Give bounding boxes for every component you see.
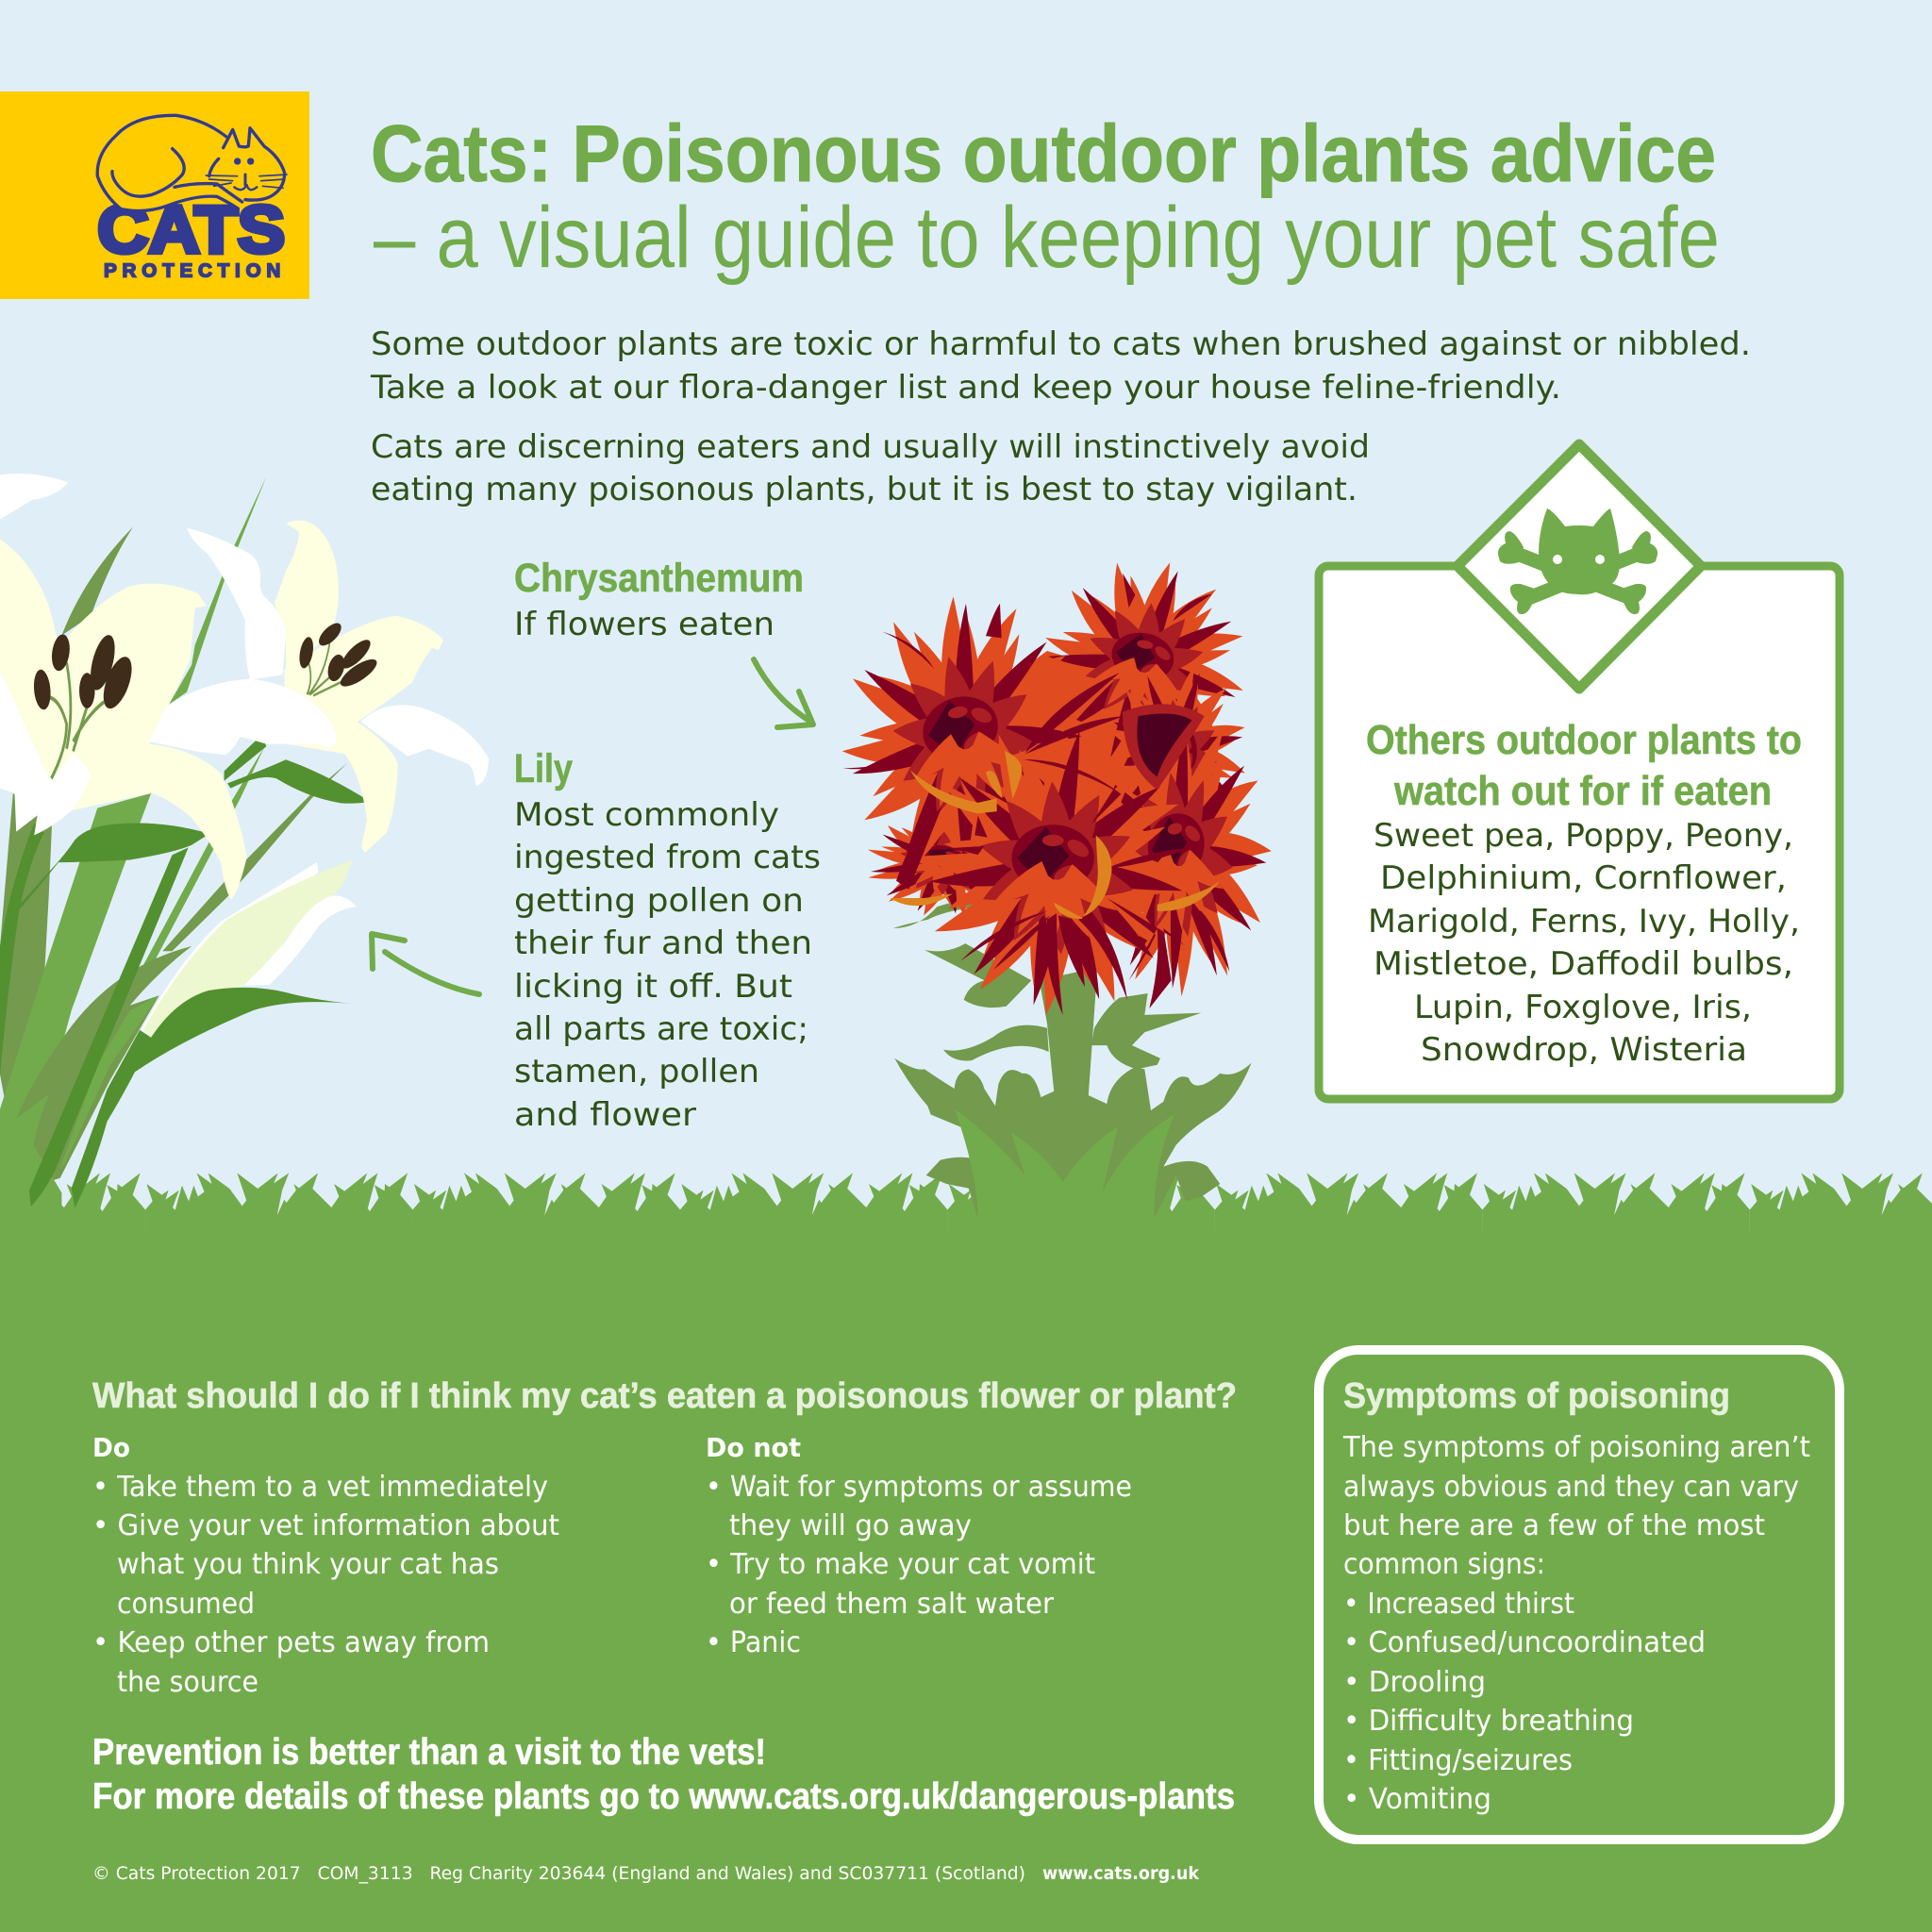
grass ground <box>0 1173 1932 1932</box>
chrysanthemum blooms <box>823 542 1280 1015</box>
chrysanthemum label: If flowers eaten <box>514 606 774 643</box>
advice heading: What should I do if I think my cat’s eaten a poisonous flower or plant? <box>92 1376 1237 1416</box>
prevention message <box>92 1732 1235 1817</box>
icon: cat skull and crossbones <box>1498 508 1657 614</box>
do list <box>92 1432 559 1699</box>
do list: • Take them to a vet immediately <box>92 1471 548 1504</box>
plant list <box>1368 817 1800 1069</box>
do list: consumed <box>117 1588 255 1621</box>
logo: Cats Protection: PROTECTION <box>104 259 280 281</box>
panel heading <box>1366 717 1802 814</box>
symptoms heading: Symptoms of poisoning <box>1343 1376 1730 1416</box>
do list: • Give your vet information about <box>92 1509 559 1542</box>
symptoms text: • Vomiting <box>1343 1783 1491 1816</box>
lily label: Most commonly <box>514 796 779 834</box>
arrow to chrysanthemum <box>754 659 813 727</box>
title: – a visual guide to keeping your pet safe <box>374 190 1720 286</box>
chrysanthemum grass tuft <box>955 1108 1174 1219</box>
title: Cats: Poisonous outdoor plants advice <box>371 109 1716 199</box>
plant list: Mistletoe, Daffodil bulbs, <box>1374 945 1793 983</box>
symptoms text: common signs: <box>1343 1548 1545 1581</box>
lily label: stamen, pollen <box>514 1053 759 1091</box>
do list: Do <box>92 1432 130 1463</box>
do not list: Do not <box>706 1432 801 1463</box>
panel heading: Others outdoor plants to <box>1366 717 1802 763</box>
plant list: Lupin, Foxglove, Iris, <box>1414 989 1752 1026</box>
symptoms text: but here are a few of the most <box>1343 1509 1765 1542</box>
symptoms text: The symptoms of poisoning aren’t <box>1342 1431 1810 1464</box>
footer: © Cats Protection 2017 COM_3113 Reg Charity 203644 (England and Wales) and SC037711 (Scotland) <box>92 1863 1025 1884</box>
do not list: • Try to make your cat vomit <box>706 1548 1095 1581</box>
panel: others outdoor plants <box>1319 444 1840 1099</box>
chrysanthemum foliage <box>893 893 1252 1219</box>
symptoms text <box>1342 1431 1810 1816</box>
lily flower right <box>149 520 489 853</box>
logo: Cats Protection <box>0 92 309 299</box>
panel: symptoms of poisoning <box>1319 1350 1840 1840</box>
intro text: eating many poisonous plants, but it is best to stay vigilant. <box>371 471 1357 508</box>
symptoms text: • Drooling <box>1343 1666 1486 1699</box>
title <box>371 109 1720 286</box>
intro text: Cats are discerning eaters and usually will instinctively avoid <box>371 428 1370 466</box>
lily label: Lily <box>514 746 573 791</box>
plant list: Marigold, Ferns, Ivy, Holly, <box>1368 903 1800 941</box>
do not list: or feed them salt water <box>729 1588 1055 1621</box>
prevention message: For more details of these plants go to www.cats.org.uk/dangerous-plants <box>92 1776 1235 1817</box>
do not list: they will go away <box>729 1509 972 1542</box>
lily label: licking it off. But <box>514 968 792 1006</box>
panel heading: watch out for if eaten <box>1393 768 1772 814</box>
plant list: Sweet pea, Poppy, Peony, <box>1374 817 1793 855</box>
intro text: Take a look at our flora-danger list and keep your house feline-friendly. <box>370 369 1561 407</box>
intro text <box>370 325 1751 508</box>
footer: www.cats.org.uk <box>1042 1863 1199 1884</box>
lily label: their fur and then <box>514 924 812 962</box>
logo: Cats Protection: CATS <box>97 192 285 267</box>
do not list <box>706 1432 1132 1659</box>
symptoms text: • Difficulty breathing <box>1343 1705 1634 1738</box>
plant list: Delphinium, Cornflower, <box>1380 859 1787 897</box>
lily flower left <box>0 474 247 899</box>
intro text: Some outdoor plants are toxic or harmful to cats when brushed against or nibbled. <box>371 325 1751 363</box>
lily label <box>514 746 821 1134</box>
symptoms text: • Confused/uncoordinated <box>1343 1626 1706 1659</box>
symptoms text: always obvious and they can vary <box>1343 1471 1799 1504</box>
lily label: getting pollen on <box>514 882 804 920</box>
symptoms text: • Fitting/seizures <box>1343 1744 1573 1777</box>
symptoms text: • Increased thirst <box>1343 1588 1574 1621</box>
lily label: all parts are toxic; <box>514 1010 808 1048</box>
plant list: Snowdrop, Wisteria <box>1421 1031 1747 1069</box>
illustration: lily plant <box>0 474 489 1226</box>
do not list: • Panic <box>706 1626 801 1659</box>
arrow to lily <box>372 934 479 994</box>
do list: • Keep other pets away from <box>92 1626 490 1659</box>
do not list: • Wait for symptoms or assume <box>706 1471 1132 1504</box>
lily label: ingested from cats <box>514 839 821 876</box>
do list: the source <box>117 1666 258 1699</box>
lily label: and flower <box>514 1096 696 1134</box>
danger diamond <box>1457 444 1701 689</box>
illustration: chrysanthemum plant <box>823 542 1280 1219</box>
chrysanthemum label <box>514 556 804 643</box>
prevention message: Prevention is better than a visit to the vets! <box>92 1732 766 1773</box>
chrysanthemum label: Chrysanthemum <box>514 556 804 601</box>
do list: what you think your cat has <box>117 1548 499 1581</box>
